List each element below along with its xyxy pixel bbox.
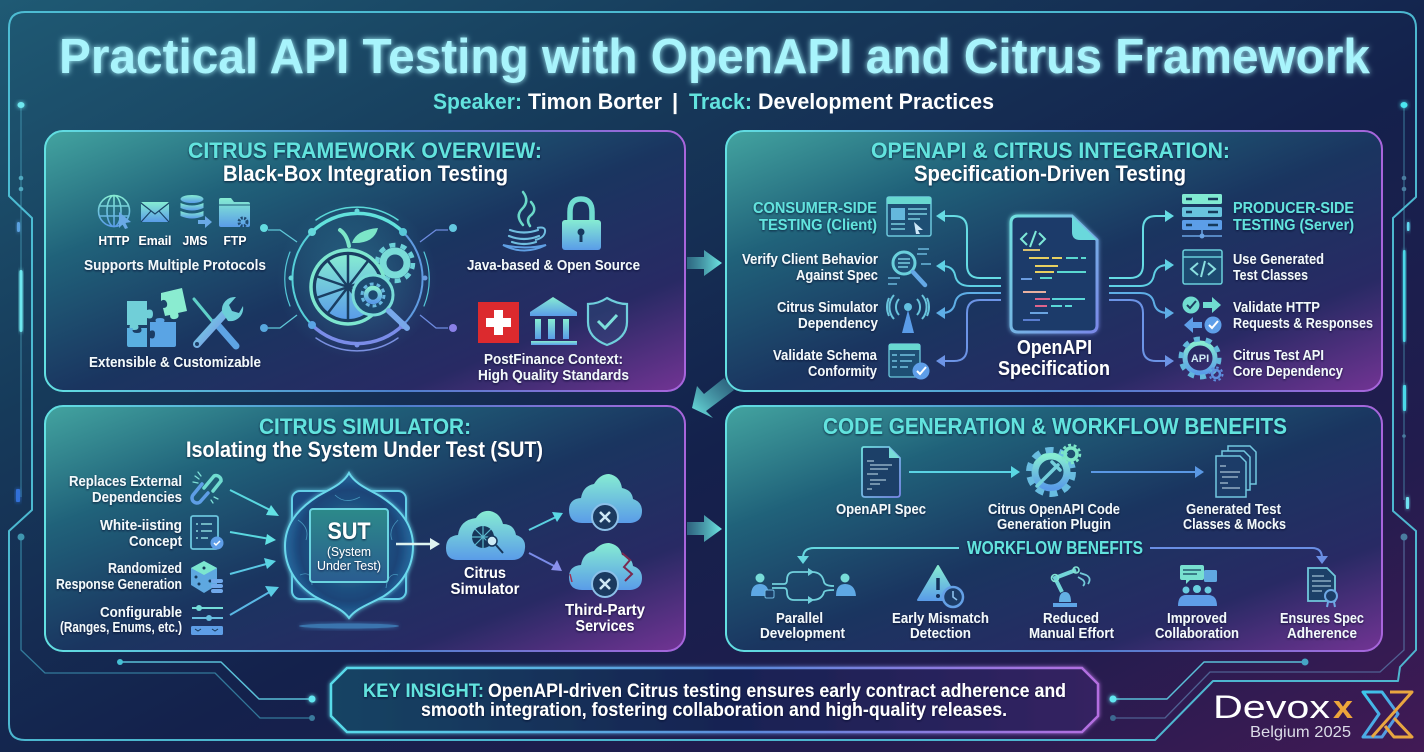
labels: workflow benefit items: Parallel bbox=[776, 611, 823, 627]
arrows: simulator to third-party services bbox=[529, 512, 563, 571]
labels: simulator capabilities: Dependencies bbox=[92, 490, 182, 506]
subtitle: speaker and track: Timon Borter bbox=[528, 89, 662, 114]
protocol labels: Email bbox=[138, 233, 172, 248]
heading: openapi and citrus integration bbox=[871, 138, 1230, 186]
icon: swiss flag bbox=[478, 302, 519, 343]
icon: whitelist clipboard bbox=[191, 516, 224, 550]
heading: openapi and citrus integration: Specification-Driven Testing bbox=[914, 161, 1186, 186]
icon: dice and data bbox=[191, 561, 223, 593]
subtitle: speaker and track: Track: bbox=[689, 89, 752, 114]
heading: citrus simulator: Isolating the System Under Test (SUT) bbox=[186, 437, 543, 462]
heading: citrus framework overview: Black-Box Integration Testing bbox=[223, 161, 508, 186]
icon: bank bbox=[530, 297, 577, 345]
heading: citrus framework overview bbox=[188, 138, 542, 186]
labels: producer side: Validate HTTP bbox=[1233, 300, 1320, 316]
labels: generation flow: Generated Test bbox=[1186, 502, 1281, 518]
icon: citrus cloud bbox=[446, 511, 525, 560]
logo: devoxx belgium 2025 bbox=[1213, 689, 1412, 741]
callout: key insight: KEY INSIGHT: bbox=[363, 681, 484, 702]
icon: collaboration people bbox=[1178, 565, 1217, 606]
icon: parallel development bbox=[751, 568, 856, 604]
callout: key insight: OpenAPI-driven Citrus testing ensures early contract adherence and bbox=[488, 681, 1066, 702]
icon: robot arm bbox=[1052, 567, 1090, 607]
labels: workflow benefit items: Development bbox=[760, 626, 845, 642]
icon: wrench and screwdriver bbox=[194, 297, 243, 346]
labels: producer side: PRODUCER-SIDE bbox=[1233, 200, 1354, 217]
labels: consumer side bbox=[742, 200, 878, 380]
icon: early mismatch alert bbox=[918, 566, 963, 607]
labels: workflow benefit items: Ensures Spec bbox=[1280, 611, 1364, 627]
labels: simulator capabilities: Configurable bbox=[100, 605, 182, 621]
labels: workflow benefit items: Collaboration bbox=[1155, 626, 1239, 642]
label: extensible and customizable: Extensible & Customizable bbox=[89, 355, 261, 371]
labels: producer side: TESTING (Server) bbox=[1233, 217, 1354, 234]
labels: generation flow bbox=[836, 502, 1286, 533]
label: citrus simulator: Citrus bbox=[464, 565, 506, 582]
arrow: integration to simulator bbox=[692, 378, 734, 418]
panel: openapi and citrus integration bbox=[726, 131, 1382, 391]
label: openapi specification: OpenAPI bbox=[1017, 337, 1092, 359]
label: sut: SUT bbox=[328, 518, 371, 545]
label: third-party services bbox=[565, 602, 645, 635]
labels: simulator capabilities: Replaces External bbox=[69, 474, 182, 490]
icon: padlock bbox=[562, 199, 601, 250]
logo: devoxx belgium 2025: x bbox=[1333, 689, 1353, 725]
arrow: plugin to generated classes bbox=[1091, 466, 1204, 478]
label: postfinance context: PostFinance Context: bbox=[484, 352, 623, 368]
arrow: simulator to code generation bbox=[687, 515, 722, 542]
icon: unavailable cloud bbox=[569, 474, 642, 530]
panel: citrus framework overview bbox=[45, 131, 685, 391]
icon: magnifier bbox=[888, 249, 931, 285]
subtitle: speaker and track: | bbox=[672, 89, 678, 114]
icon: code generation gear bbox=[1029, 445, 1080, 494]
labels: producer side: Requests & Responses bbox=[1233, 316, 1373, 332]
emblem: citrus with magnifier and gear bbox=[260, 199, 457, 359]
panel: citrus simulator bbox=[45, 406, 685, 651]
heading: code generation: CODE GENERATION & WORKFLOW BENEFITS bbox=[823, 413, 1287, 439]
labels: generation flow: Citrus OpenAPI Code bbox=[988, 502, 1120, 518]
labels: consumer side: Against Spec bbox=[796, 268, 878, 284]
labels: simulator capabilities: (Ranges, Enums, etc.) bbox=[60, 620, 182, 636]
icon: puzzle pieces bbox=[127, 288, 187, 347]
labels: generation flow: OpenAPI Spec bbox=[836, 502, 926, 518]
arrow: overview to integration bbox=[687, 250, 722, 276]
arrow: spec to plugin bbox=[909, 466, 1020, 478]
labels: simulator capabilities: Randomized bbox=[108, 561, 182, 577]
labels: workflow benefit items: Detection bbox=[910, 626, 971, 642]
label: citrus simulator: Simulator bbox=[450, 581, 520, 598]
callout: key insight: smooth integration, fostering collaboration and high-quality releases. bbox=[421, 700, 1007, 721]
labels: workflow benefit items: Early Mismatch bbox=[892, 611, 989, 627]
icon: server stack bbox=[1182, 194, 1222, 238]
labels: workflow benefit items: Reduced bbox=[1043, 611, 1099, 627]
labels: workflow benefit items bbox=[760, 611, 1364, 642]
logo: devoxx belgium 2025: Devox bbox=[1213, 689, 1330, 725]
title: Practical API Testing with OpenAPI and Citrus Framework bbox=[59, 30, 1371, 84]
protocol labels: FTP bbox=[224, 233, 247, 248]
icon: api gear: API bbox=[1191, 353, 1209, 365]
labels: simulator capabilities: Concept bbox=[129, 534, 182, 550]
heading: citrus framework overview: CITRUS FRAMEWORK OVERVIEW: bbox=[188, 138, 542, 163]
icon: devoxx x mark bbox=[1363, 692, 1412, 737]
protocol labels: JMS bbox=[182, 233, 208, 248]
labels: consumer side: Dependency bbox=[798, 316, 878, 332]
label: openapi specification bbox=[998, 337, 1110, 380]
subtitle: speaker and track: Speaker: bbox=[433, 89, 522, 114]
labels: simulator capabilities: Response Generation bbox=[56, 577, 182, 593]
labels: workflow benefit items: Manual Effort bbox=[1029, 626, 1114, 642]
label: third-party services: Third-Party bbox=[565, 602, 645, 619]
subtitle: speaker and track: Development Practices bbox=[758, 89, 994, 114]
labels: producer side: Core Dependency bbox=[1233, 364, 1343, 380]
label: openapi specification: Specification bbox=[998, 358, 1110, 380]
subtitle: speaker and track bbox=[433, 89, 994, 114]
labels: producer side: Citrus Test API bbox=[1233, 348, 1324, 364]
label: sut bbox=[317, 518, 381, 573]
icon: schema check window bbox=[889, 344, 930, 380]
labels: simulator capabilities bbox=[56, 474, 182, 636]
labels: producer side: Test Classes bbox=[1233, 268, 1308, 284]
heading: openapi and citrus integration: OPENAPI & CITRUS INTEGRATION: bbox=[871, 138, 1230, 163]
label: java-based and open source: Java-based & Open Source bbox=[467, 258, 640, 274]
icon: browser window bbox=[887, 197, 931, 236]
labels: consumer side: Conformity bbox=[808, 364, 877, 380]
icon: sliders bbox=[191, 605, 223, 635]
label: supports multiple protocols: Supports Multiple Protocols bbox=[84, 258, 266, 274]
protocol labels: HTTP bbox=[98, 233, 130, 248]
labels: generation flow: Classes & Mocks bbox=[1183, 517, 1286, 533]
label: citrus simulator bbox=[450, 565, 520, 598]
icon: openapi document bbox=[1011, 216, 1097, 332]
labels: workflow benefit items: Adherence bbox=[1287, 626, 1357, 642]
panel: code generation and workflow benefits bbox=[726, 406, 1382, 651]
icon: globe http bbox=[98, 196, 131, 229]
labels: consumer side: Citrus Simulator bbox=[777, 300, 878, 316]
icon: api gear bbox=[1181, 339, 1222, 380]
labels: producer side: Use Generated bbox=[1233, 252, 1324, 268]
label: postfinance context: High Quality Standards bbox=[478, 368, 629, 384]
sut sphere bbox=[285, 473, 413, 628]
heading: citrus simulator bbox=[186, 414, 543, 462]
icon: folder ftp bbox=[219, 198, 250, 227]
label: sut: (System bbox=[327, 545, 371, 559]
icon: envelope bbox=[141, 202, 169, 222]
label: sut: Under Test) bbox=[317, 559, 381, 573]
arrow: sut to simulator bbox=[396, 538, 440, 550]
icon: database jms bbox=[180, 195, 212, 228]
labels: workflow benefit items: Improved bbox=[1167, 611, 1227, 627]
labels: consumer side: Validate Schema bbox=[773, 348, 878, 364]
icon: openapi spec document bbox=[862, 447, 900, 497]
label: postfinance context bbox=[478, 352, 629, 384]
labels: simulator capabilities: White-iisting bbox=[100, 518, 182, 534]
protocol labels bbox=[98, 233, 247, 248]
icon: certified spec document bbox=[1308, 568, 1337, 607]
labels: producer side bbox=[1233, 200, 1373, 380]
labels: consumer side: Verify Client Behavior bbox=[742, 252, 878, 268]
heading: citrus simulator: CITRUS SIMULATOR: bbox=[259, 414, 471, 439]
icon: code window bbox=[1183, 250, 1222, 284]
icon: unstable cloud bbox=[569, 543, 642, 597]
labels: consumer side: CONSUMER-SIDE bbox=[753, 200, 877, 217]
heading: workflow benefits: WORKFLOW BENEFITS bbox=[967, 538, 1143, 558]
logo: devoxx belgium 2025: Belgium 2025 bbox=[1250, 724, 1351, 741]
icon: java cup bbox=[503, 192, 546, 250]
icon: stacked generated files bbox=[1216, 446, 1256, 497]
icon: broken chain link bbox=[192, 472, 221, 503]
callout: key insight bbox=[331, 668, 1098, 732]
arrows: capabilities to sut bbox=[230, 490, 279, 615]
icon: signal tower bbox=[887, 295, 929, 333]
connectors: spec to consumer and producer bbox=[936, 210, 1174, 367]
labels: consumer side: TESTING (Client) bbox=[759, 217, 877, 234]
icon: validated request and response bbox=[1182, 296, 1222, 334]
labels: generation flow: Generation Plugin bbox=[997, 517, 1111, 533]
icon: shield check bbox=[588, 298, 627, 345]
arrows: workflow benefits branches bbox=[797, 548, 1328, 564]
label: third-party services: Services bbox=[576, 618, 635, 635]
